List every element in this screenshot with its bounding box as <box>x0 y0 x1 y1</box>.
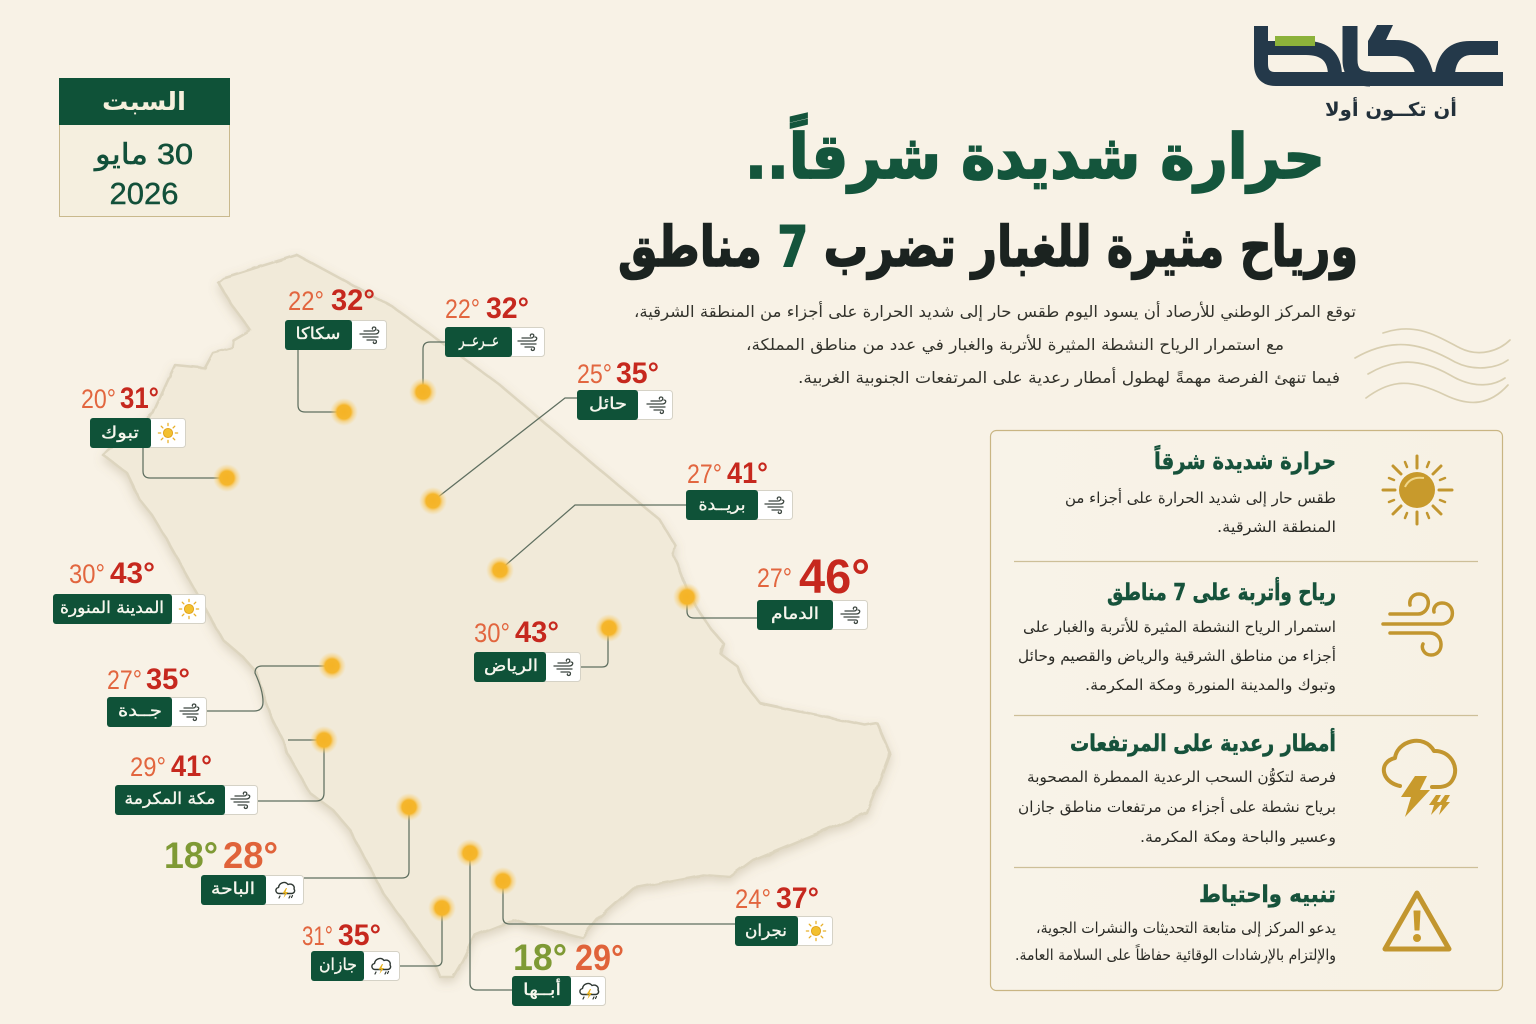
city: Arar: عــرعــر <box>458 331 499 351</box>
item: wind and dust: استمرار الرياح النشطة المثيرة للأتربة والغبار على <box>1023 617 1336 636</box>
item: extreme heat <box>1065 445 1336 536</box>
city: Al Baha: الباحة <box>211 879 255 898</box>
city: Jeddah: 35° <box>146 663 190 696</box>
city: Arar <box>445 292 544 357</box>
item: warning: تنبيه واحتياط <box>1199 882 1336 908</box>
city: Sakaka <box>285 284 386 350</box>
city: Riyadh <box>474 616 580 682</box>
city: Madinah: المدينة المنورة <box>60 598 164 618</box>
city: Madinah: 30° <box>69 559 105 589</box>
city: Arar: 22° <box>445 294 480 324</box>
year: 2026 <box>110 176 178 211</box>
city: Dammam: 46° <box>799 551 870 604</box>
city markers <box>213 378 701 922</box>
item: wind and dust <box>1018 576 1336 694</box>
city: Tabuk: تبوك <box>101 423 139 443</box>
item: wind and dust: وتبوك والمدينة المنورة ومكة المكرمة. <box>1085 676 1336 694</box>
decorative wind waves <box>1355 329 1510 402</box>
city: Dammam: 27° <box>757 563 792 593</box>
city: Dammam: الدمام <box>771 604 819 623</box>
city: Jazan <box>302 919 400 981</box>
city: Najran <box>735 882 832 946</box>
city: Abha: أبــها <box>523 978 561 1000</box>
city: Arar: 32° <box>486 292 529 325</box>
city: Abha: 29° <box>575 937 624 978</box>
city: Al Baha: 28° <box>223 835 278 876</box>
city: Najran: 37° <box>776 882 819 915</box>
item: thunder rain: فرصة لتكوُّن السحب الرعدية الممطرة المصحوبة <box>1027 767 1336 786</box>
logo tagline: أن تكــون أولا <box>1325 97 1457 121</box>
city: Abha <box>512 937 624 1006</box>
city: Tabuk: 31° <box>120 382 159 415</box>
item: wind and dust: أجزاء من مناطق الشرقية والرياض والقصيم وحائل <box>1018 646 1336 665</box>
icon: sun <box>1383 456 1452 524</box>
city: Jeddah <box>107 663 206 727</box>
city: Madinah <box>53 557 206 624</box>
intro paragraph: مع استمرار الرياح النشطة المثيرة للأتربة والغبار في عدد من مناطق المملكة، <box>746 334 1284 355</box>
city: Makkah <box>115 750 258 815</box>
city: Buraydah: بريــدة <box>698 495 746 515</box>
icon: thunder cloud <box>1384 741 1455 817</box>
item: warning: والإلتزام بالإرشادات الوقائية حفاظاً على السلامة العامة. <box>1015 944 1336 964</box>
city: Al Baha: 18° <box>164 835 218 876</box>
city: Buraydah <box>686 457 792 520</box>
date box <box>59 78 230 216</box>
city: Jazan: جازان <box>319 955 357 975</box>
icon: warning triangle <box>1385 893 1449 949</box>
item: thunder rain: برياح نشطة على أجزاء من مرتفعات مناطق جازان <box>1018 797 1336 816</box>
city: Riyadh: 43° <box>515 616 559 649</box>
city: Hail: 35° <box>616 357 659 390</box>
item: extreme heat: المنطقة الشرقية. <box>1217 518 1336 536</box>
item: extreme heat: طقس حار إلى شديد الحرارة على أجزاء من <box>1065 488 1336 507</box>
city: Najran: 24° <box>735 884 771 914</box>
city: Tabuk <box>81 382 186 448</box>
city: Makkah: 29° <box>130 752 166 782</box>
city: Makkah: 41° <box>171 750 212 783</box>
city: Al Baha <box>164 835 304 905</box>
date: 30 مايو <box>93 139 193 171</box>
logo <box>1261 25 1503 121</box>
city: Jeddah: 27° <box>107 665 142 695</box>
icon: wind <box>1383 594 1452 655</box>
city: Dammam <box>757 551 870 630</box>
city: Jeddah: جــدة <box>118 701 162 720</box>
city: Hail: 25° <box>577 359 612 389</box>
city: Abha: 18° <box>513 937 567 978</box>
item: thunder rain: وعسير والباحة ومكة المكرمة. <box>1140 828 1336 846</box>
city: Jazan: 31° <box>302 921 333 951</box>
city: Najran: نجران <box>745 921 787 941</box>
city: Hail <box>577 357 672 420</box>
map of Saudi Arabia <box>103 255 890 977</box>
panel: weather summary <box>990 430 1502 990</box>
city: Sakaka: 32° <box>331 284 375 317</box>
connector lines <box>143 342 757 990</box>
city: Sakaka: 22° <box>288 286 324 316</box>
city: Tabuk: 20° <box>81 384 116 414</box>
title line 1: حرارة شديدة شرقاً.. <box>745 112 1325 193</box>
day name: السبت <box>102 87 186 116</box>
city: Hail: حائل <box>589 394 627 413</box>
city: Madinah: 43° <box>110 557 155 590</box>
intro paragraph: فيما تنهئ الفرصة مهمةً لهطول أمطار رعدية على المرتفعات الجنوبية الغربية. <box>798 367 1340 388</box>
title line 2: ورياح مثيرة للغبار تضرب 7 مناطق <box>618 215 1358 280</box>
item: wind and dust: رياح وأتربة على 7 مناطق <box>1107 576 1336 606</box>
intro paragraph: توقع المركز الوطني للأرصاد أن يسود اليوم طقس حار إلى شديد الحرارة على أجزاء من المنطقة الشرقية، <box>634 301 1356 322</box>
city: Buraydah: 27° <box>687 459 722 489</box>
item: thunder rain <box>1018 727 1336 846</box>
city: Riyadh: 30° <box>474 618 510 648</box>
city: Jazan: 35° <box>338 919 381 952</box>
intro paragraph <box>634 301 1356 388</box>
item: extreme heat: حرارة شديدة شرقاً <box>1154 445 1336 475</box>
city: Buraydah: 41° <box>727 457 768 490</box>
city: Makkah: مكة المكرمة <box>124 789 216 809</box>
city: Riyadh: الرياض <box>484 656 538 676</box>
main title <box>618 112 1358 280</box>
city: Sakaka: سكاكا <box>296 324 340 343</box>
item: warning: يدعو المركز إلى متابعة التحديثات والنشرات الجوية، <box>1036 919 1336 937</box>
item: warning <box>1015 882 1336 964</box>
item: thunder rain: أمطار رعدية على المرتفعات <box>1070 727 1336 757</box>
